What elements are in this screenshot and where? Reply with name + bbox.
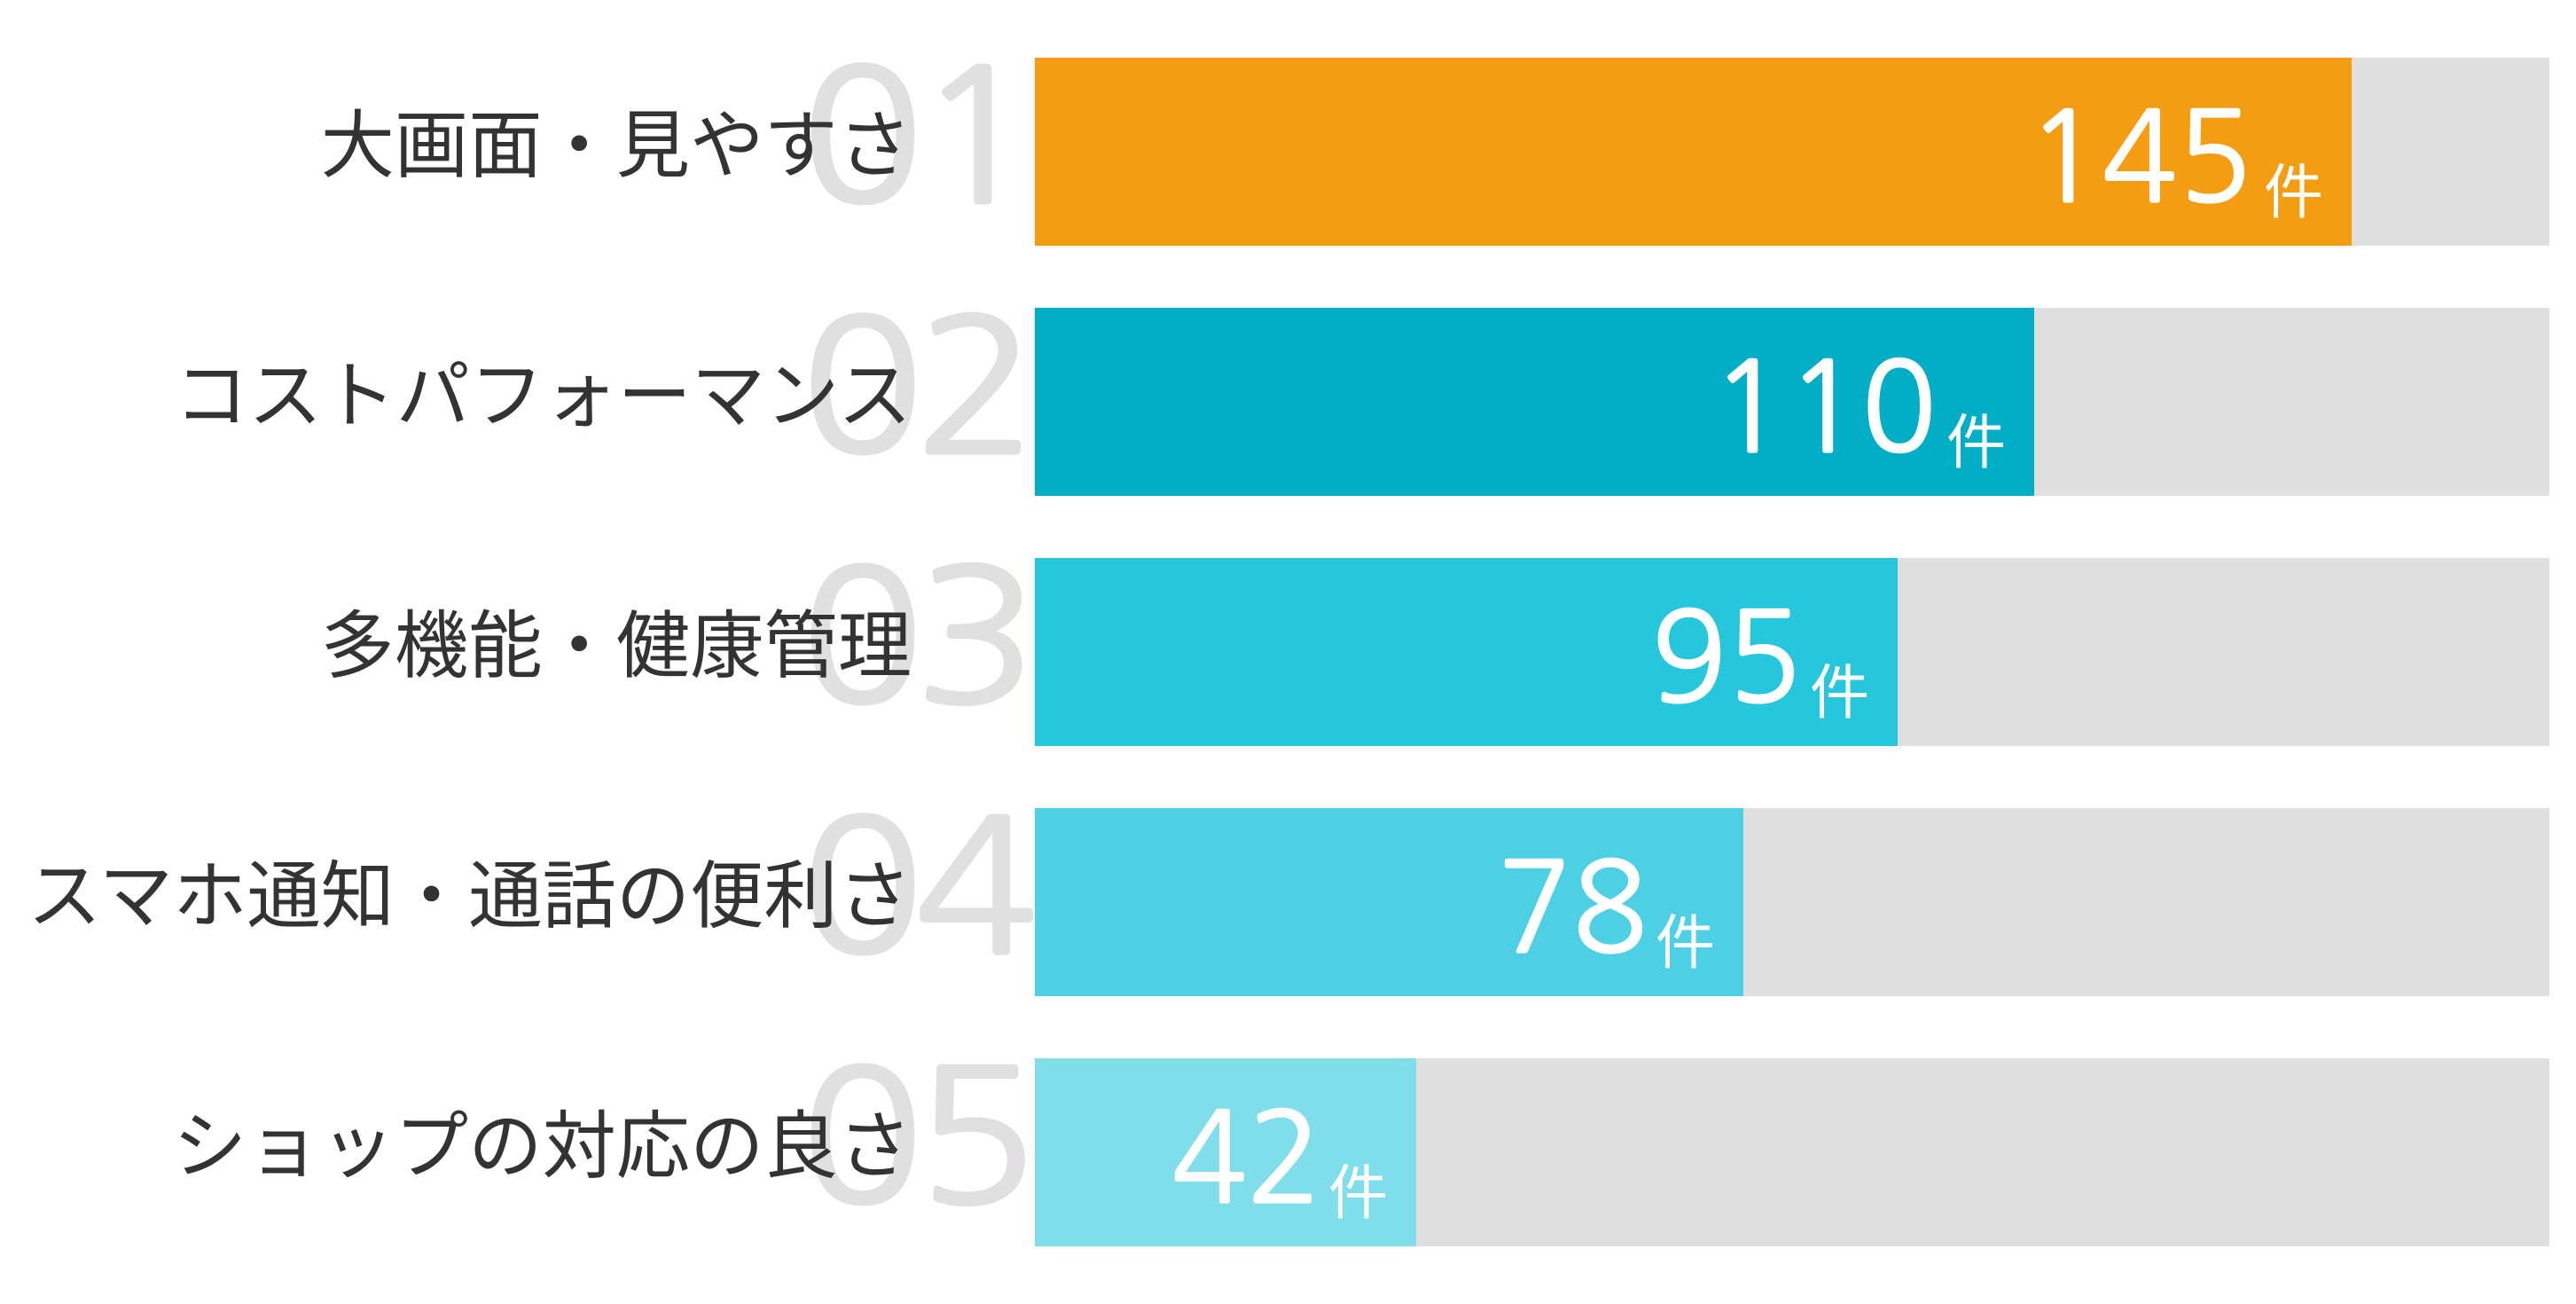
- bar 110: [1035, 308, 2034, 496]
- value 95: 95: [1651, 596, 1802, 720]
- rank number 02: 02: [801, 295, 1029, 479]
- label: notifications and calls: スマホ通知・通話の便利さ: [27, 855, 912, 938]
- value 78: 78: [1497, 846, 1648, 970]
- rank number 01: 01: [801, 45, 1029, 229]
- label: multifunction and health: 多機能・健康管理: [321, 605, 912, 687]
- rank number 05: 05: [801, 1046, 1029, 1229]
- value 42: 42: [1171, 1096, 1322, 1221]
- rank number 04: 04: [801, 796, 1032, 979]
- bar 42: [1035, 1058, 1416, 1246]
- unit: 件: [1656, 910, 1715, 977]
- value 145: 145: [2026, 96, 2252, 220]
- bar 95: [1035, 558, 1898, 746]
- unit: 件: [1946, 410, 2006, 476]
- track: [1035, 808, 2549, 996]
- label: shop service: ショップの対応の良さ: [173, 1105, 912, 1188]
- bar 78: [1035, 808, 1743, 996]
- row 2: cost performance: [175, 295, 2549, 496]
- row 4: notifications and calls: [27, 796, 2549, 996]
- bar 145: [1035, 58, 2352, 246]
- track: [1035, 58, 2549, 246]
- row 3: multifunction and health: [321, 546, 2549, 746]
- label: cost performance: コストパフォーマンス: [175, 355, 912, 437]
- track: [1035, 558, 2549, 746]
- track: [1035, 1058, 2549, 1246]
- row 5: shop service: [173, 1046, 2549, 1246]
- label: large screen and visibility: 大画面・見やすさ: [321, 105, 912, 187]
- rank number 03: 03: [801, 546, 1029, 729]
- unit: 件: [2264, 160, 2323, 226]
- value 110: 110: [1711, 346, 1937, 470]
- unit: 件: [1328, 1160, 1388, 1227]
- unit: 件: [1810, 660, 1869, 727]
- track: [1035, 308, 2549, 496]
- row 1: large screen and visibility: [321, 45, 2549, 246]
